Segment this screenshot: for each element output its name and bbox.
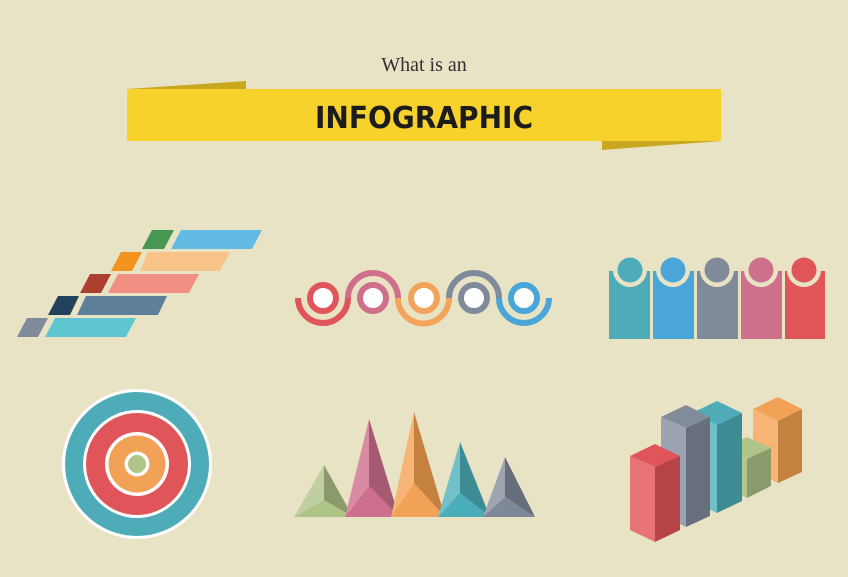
parallelogram bars xyxy=(17,230,262,337)
subtitle: What is an xyxy=(381,54,467,76)
pyramids xyxy=(294,412,535,517)
target xyxy=(62,389,212,539)
wave rings xyxy=(298,273,549,324)
banner xyxy=(127,81,721,150)
people columns xyxy=(609,253,825,339)
title: INFOGRAPHIC xyxy=(315,101,533,136)
3d bar chart xyxy=(630,397,802,542)
